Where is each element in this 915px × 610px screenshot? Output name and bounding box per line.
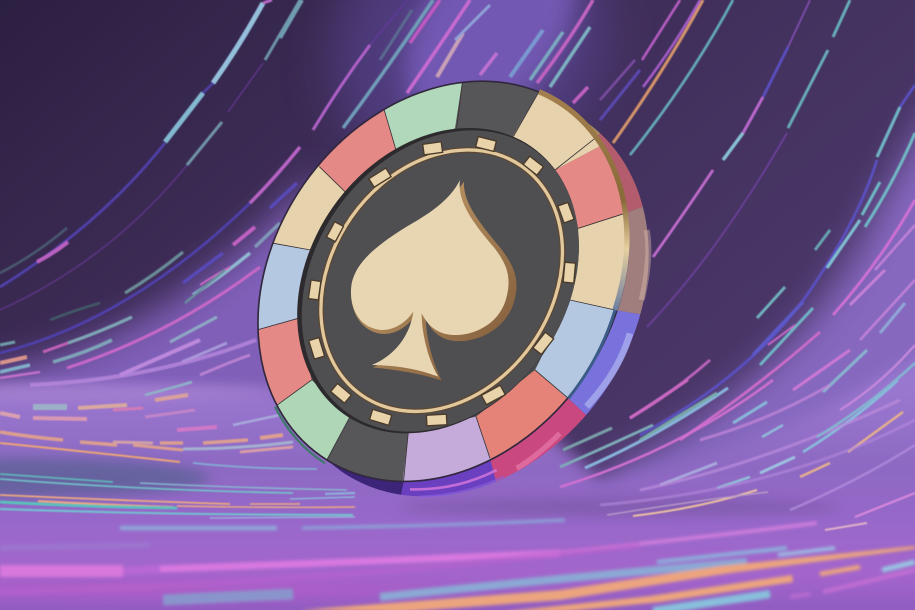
segment: top right cream (512, 94, 600, 170)
inner dark disc (239, 73, 637, 488)
segment: upper left cream (274, 166, 345, 250)
chip face: coloured segments (258, 82, 624, 481)
rim highlights (642, 230, 648, 300)
segment seams (257, 80, 625, 483)
light streaks: top centre (280, 0, 640, 130)
icon: spade (351, 180, 516, 381)
light streaks: upper right arcs (613, 0, 915, 440)
rim tick marks (308, 137, 576, 426)
segment: bottom dark (328, 418, 408, 480)
segment: lower right blue (535, 300, 614, 398)
segment: bottom right red (476, 370, 567, 458)
segment: left blue (258, 243, 310, 329)
poker chip (257, 80, 652, 498)
segment: bottom lilac (402, 416, 491, 481)
segment: left red (258, 319, 312, 404)
segment: upper left red (318, 110, 396, 192)
segment: lower left green (277, 380, 349, 459)
chip edge (182, 9, 705, 554)
chip rim (332, 124, 652, 498)
light streaks: left middle (0, 395, 355, 518)
segment: top green (384, 83, 462, 149)
light streaks: lower right sweep (560, 345, 915, 530)
segment: right red (556, 146, 623, 228)
light streaks: upper left arcs (0, 0, 300, 395)
gold inner ring (271, 103, 612, 458)
light streaks: bottom wide bands (0, 520, 915, 610)
segment: top dark (456, 82, 538, 136)
segment: right cream (570, 214, 624, 310)
